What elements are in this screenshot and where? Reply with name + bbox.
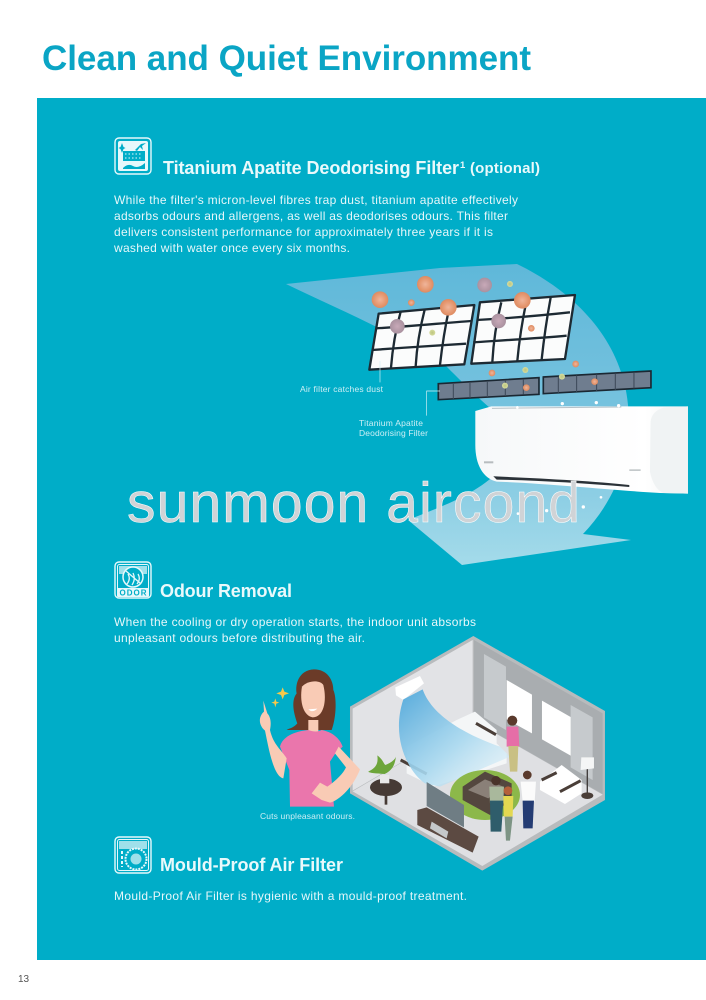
indoor unit [475,406,688,494]
label: cuts odours: Cuts unpleasant odours. [260,811,355,821]
page number: 13 [18,974,30,985]
section: titanium apatite filter [113,138,540,255]
section: mould-proof filter [114,837,467,903]
icon: deodorising filter [115,138,151,174]
label: air filter: Air filter catches dust [300,384,384,394]
title: Clean and Quiet Environment [42,39,531,78]
heading: titanium apatite: Titanium Apatite Deodorising Filter [163,158,459,178]
icon: odour [115,562,151,598]
illustration: woman and living room [260,636,605,871]
deodorising filter strips [438,371,651,400]
heading: mould-proof: Mould-Proof Air Filter [160,855,343,875]
label: deodorising filter: Deodorising Filter [359,428,428,438]
icon: mould-proof [115,837,151,873]
icon: odour: ODOR [120,588,147,598]
body text: titanium apatite: While the filter's micron-level fibres trap dust, titanium apatite effectively [114,193,518,207]
body text: titanium apatite [113,193,518,255]
superscript: 1 [460,160,466,171]
label: deodorising filter: Titanium Apatite [359,418,423,428]
woman [260,669,360,807]
body text: odour removal [114,615,476,645]
diagram: air conditioner with filters [286,264,688,565]
air flow swoosh [286,264,631,565]
body text: odour removal: When the cooling or dry operation starts, the indoor unit absorbs [114,615,476,629]
room [350,636,605,871]
air filter right [471,295,575,364]
label: deodorising filter [359,418,428,438]
people in room [489,716,536,841]
heading suffix: optional: (optional) [470,160,540,177]
section: odour removal [114,562,476,645]
body text: odour removal: unpleasant odours before distributing the air. [114,631,365,645]
body text: titanium apatite: washed with water once every six months. [113,241,350,255]
watermark: sunmoon aircond [127,471,580,535]
sparkles [516,401,620,515]
air filter left [369,305,474,370]
body text: titanium apatite: adsorbs odours and allergens, as well as deodorises odours. This filter [114,209,508,223]
heading: odour removal: Odour Removal [160,581,292,601]
body text: titanium apatite: delivers consistent performance for approximately three years if it is [114,225,493,239]
leader lines [380,361,440,416]
dust particles [372,276,598,391]
body text: mould-proof: Mould-Proof Air Filter is hygienic with a mould-proof treatment. [114,889,467,903]
